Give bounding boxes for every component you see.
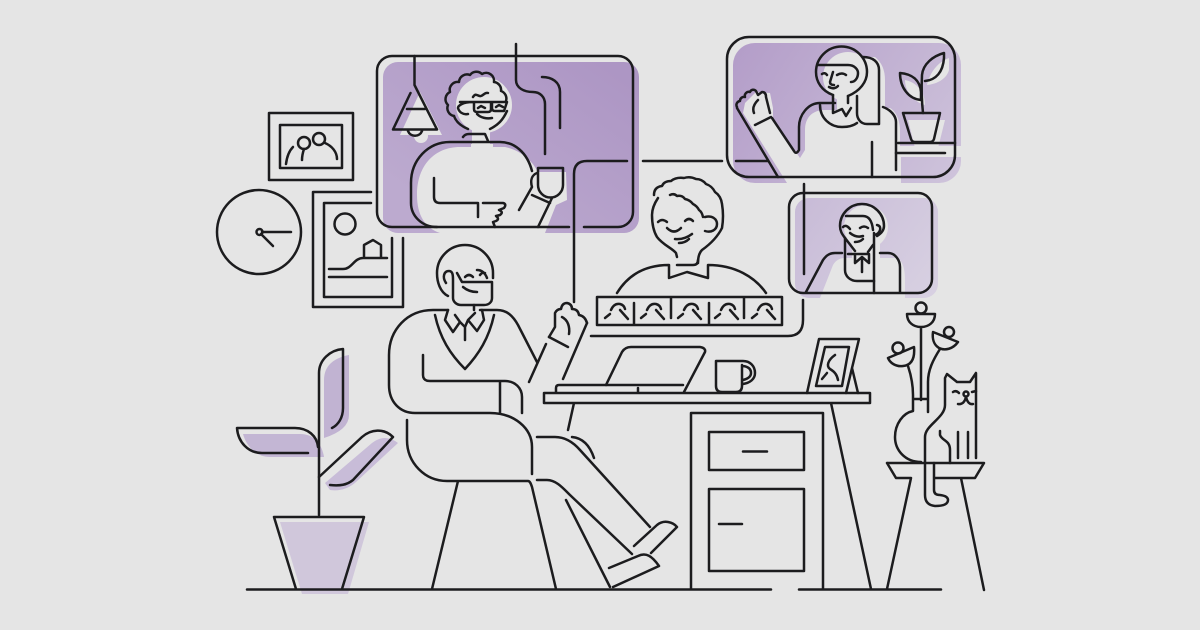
coffee mug <box>716 361 755 392</box>
photo frame on desk <box>807 339 859 393</box>
panel: video tile with person in tie <box>789 184 938 298</box>
figure: older man on a chair waving <box>389 245 677 589</box>
plant on floor <box>237 349 398 594</box>
vase with flowers <box>888 302 958 462</box>
icon: pendant lamp <box>393 56 437 136</box>
shelf and potted plant <box>736 53 955 161</box>
filmstrip: row of participant thumbnails <box>597 297 782 325</box>
panel: video tile with glasses person <box>377 44 722 302</box>
figure: waving woman <box>736 46 896 177</box>
floor line <box>247 588 941 591</box>
cables over the tile <box>516 44 722 302</box>
plant stool <box>887 463 984 590</box>
panel: video tile with waving woman <box>727 37 970 183</box>
picture frame: landscape with house <box>313 192 403 307</box>
cat on stool <box>925 373 976 506</box>
illustration: video call scene <box>216 36 986 594</box>
desk with cabinet <box>544 393 871 589</box>
figure: curly-haired person with glasses and cup <box>411 72 563 227</box>
cable under filmstrip <box>591 300 803 336</box>
figure: smiling man with short curly hair <box>617 177 766 293</box>
laptop <box>556 347 705 392</box>
figure: smiling person with tie <box>806 204 900 293</box>
picture frame: couple portrait <box>269 113 353 180</box>
icon: wall clock <box>217 190 301 274</box>
